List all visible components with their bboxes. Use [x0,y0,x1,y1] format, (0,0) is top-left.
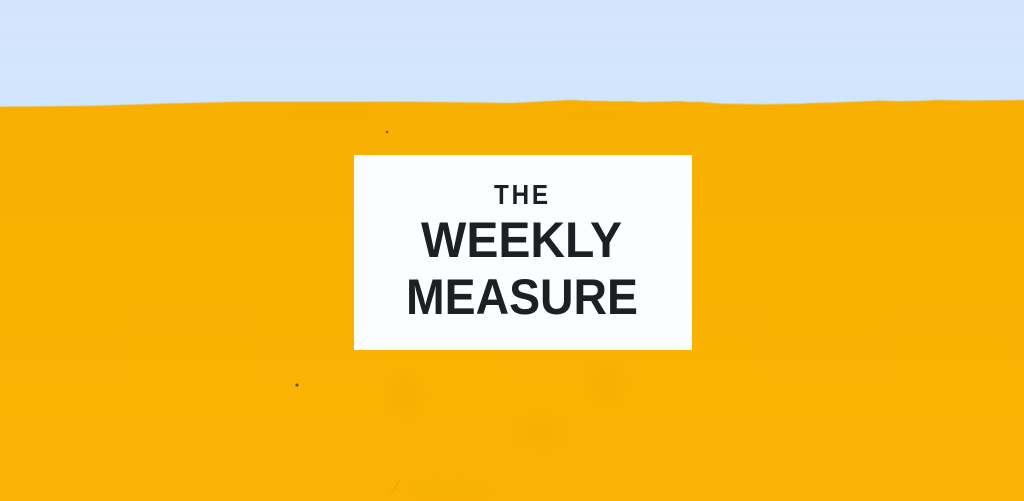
title card [354,155,692,350]
title: THE: THE [494,181,551,210]
background: pale blue sky with torn edge [0,0,1024,107]
title: WEEKLY: WEEKLY [421,211,622,268]
title: MEASURE: MEASURE [406,268,638,325]
